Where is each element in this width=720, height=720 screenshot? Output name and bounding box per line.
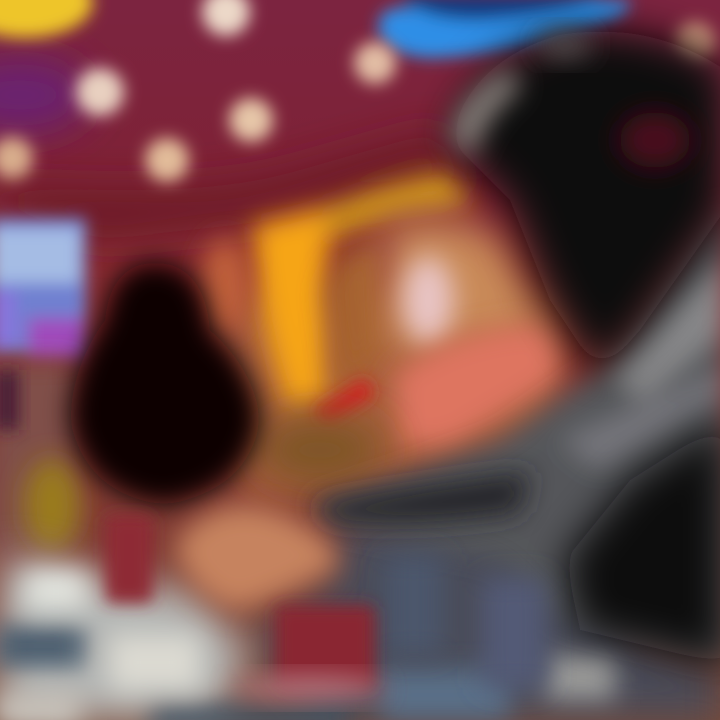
blue ceiling light [378,0,630,58]
black head left [70,262,260,505]
table checks [0,570,615,720]
black lower right [565,420,720,665]
gray top of cap [537,31,593,59]
red cup front [275,605,375,690]
orange left of dark head [201,237,249,333]
yellow bottle [24,459,80,551]
gray cap edge [448,68,522,160]
lower background dark zone [250,500,720,720]
pink skin of central figure [395,325,558,445]
hand [175,507,340,610]
hair right of central figure [385,219,545,350]
purple glow top left [0,57,90,133]
black right figure [450,32,720,375]
red mark on cap [619,112,691,168]
light patch centre [402,256,454,344]
hair of central figure [325,240,385,395]
brown shoulder [255,415,385,485]
dark band across wall [0,130,470,240]
dark left column [0,370,19,430]
blue gray cups right [385,555,546,688]
orange panel [252,172,472,410]
red collar [312,378,375,425]
yellow ceiling light [0,0,93,38]
lower left background [0,362,75,552]
round ceiling lights [0,0,715,182]
dark sleeve strip [315,472,530,523]
gray right figure sleeve [310,200,720,660]
person background torso tones [220,290,560,500]
pink base of red cup [235,676,385,700]
left screen [0,218,86,360]
red cup left [105,515,153,603]
table surface [0,555,250,720]
